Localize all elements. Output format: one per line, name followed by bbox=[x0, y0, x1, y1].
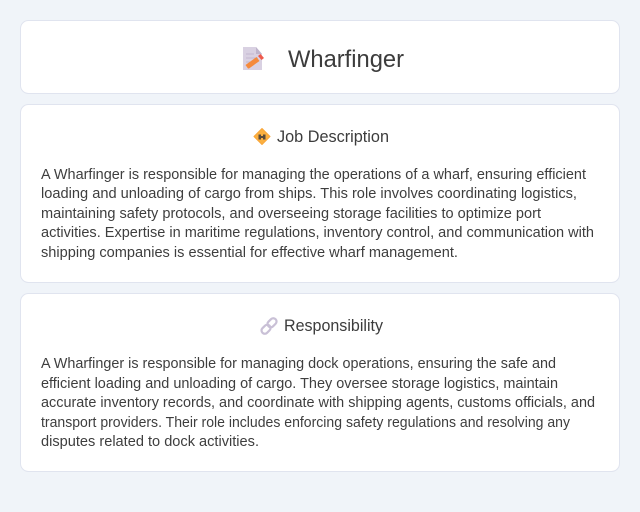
text block: responsibility: A Wharfinger is responsible for managing dock operations, ensuring the safe and bbox=[41, 356, 556, 372]
title: Wharfinger bbox=[288, 46, 404, 73]
heading: job description: Job Description bbox=[277, 128, 389, 146]
text block: job description: shipping companies is essential for effective wharf management. bbox=[41, 245, 458, 261]
icon: diamond road sign bbox=[254, 128, 270, 144]
text block: responsibility: accurate inventory records, and coordinate with shipping agents, customs officials, and bbox=[41, 395, 595, 411]
panel: responsibility bbox=[20, 294, 620, 472]
text block: job description bbox=[41, 167, 594, 261]
text block: responsibility: disputes related to dock activities. bbox=[41, 434, 259, 450]
heading: responsibility: Responsibility bbox=[284, 317, 384, 335]
panel: header bbox=[20, 20, 620, 94]
text block: job description: activities. Expertise in maritime regulations, inventory control, and communication with bbox=[41, 225, 594, 241]
text block: responsibility: transport providers. Their role includes enforcing safety regulations and resolving any bbox=[41, 415, 571, 431]
icon: document with pencil bbox=[243, 47, 264, 70]
text block: job description: loading and unloading of cargo from ships. This role involves coordinating logistics, bbox=[41, 186, 577, 202]
text block: job description: A Wharfinger is responsible for managing the operations of a wharf, ensuring efficient bbox=[41, 167, 586, 183]
text block: job description: maintaining safety protocols, and overseeing storage facilities to optimize port bbox=[41, 206, 541, 222]
text block: responsibility bbox=[41, 356, 595, 450]
panel: job description bbox=[20, 104, 620, 282]
text block: responsibility: efficient loading and unloading of cargo. They oversee storage logistics, maintain bbox=[41, 376, 558, 392]
icon: chain link bbox=[260, 317, 278, 335]
